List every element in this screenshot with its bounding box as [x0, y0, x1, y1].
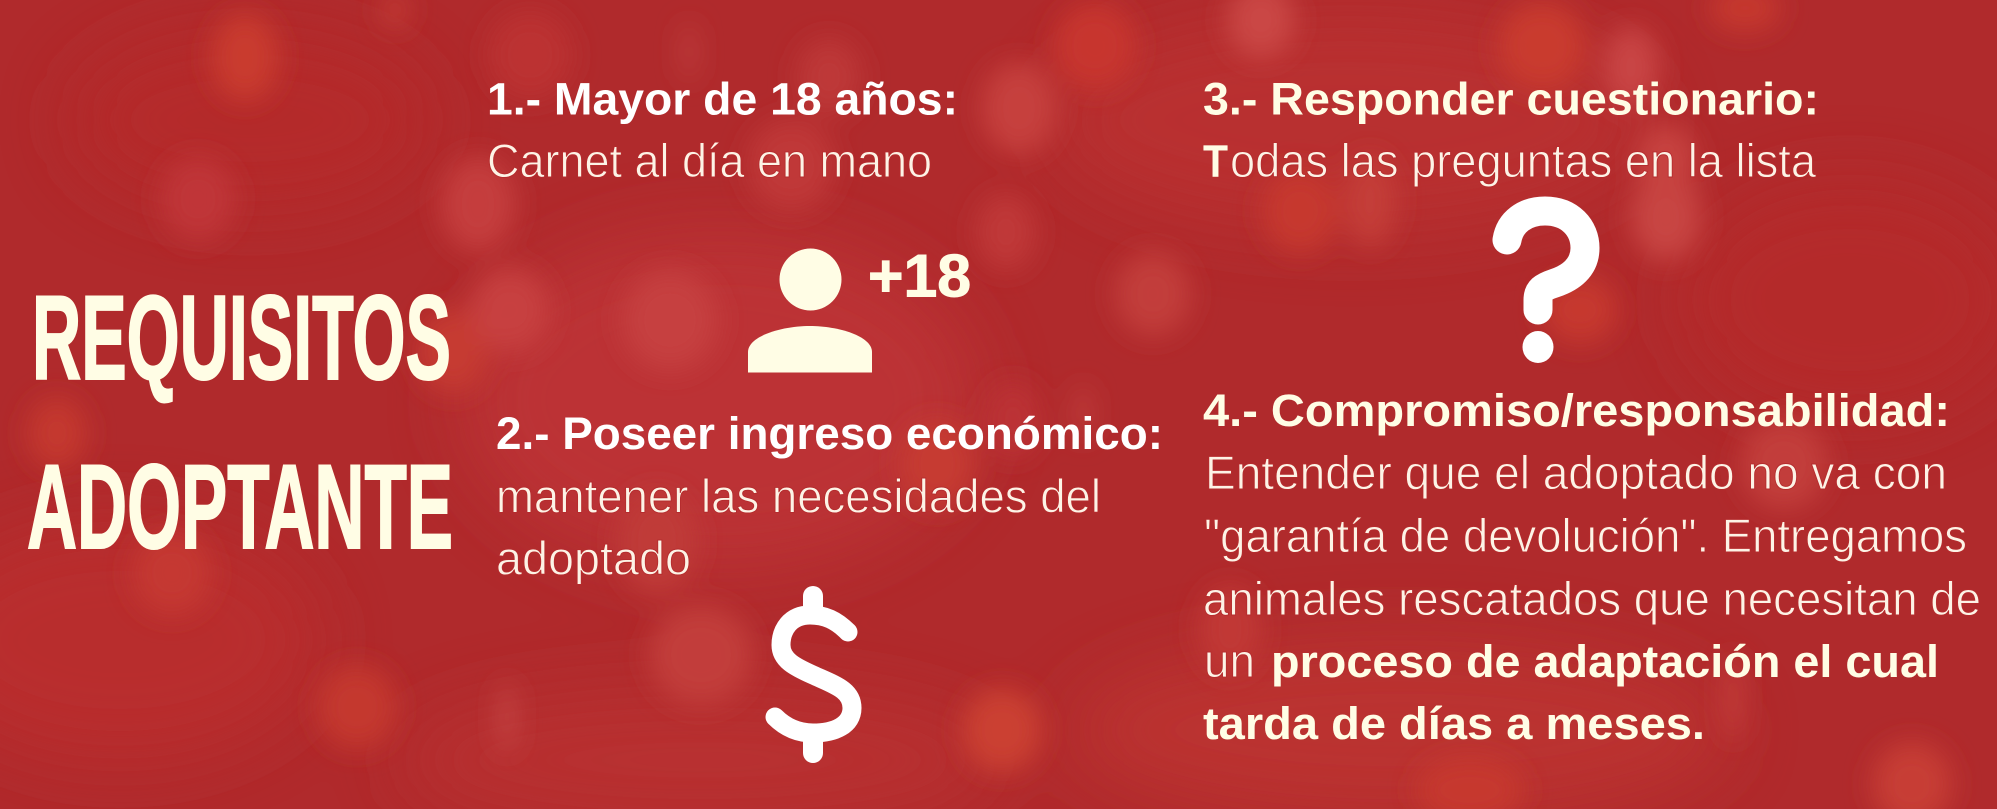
requirement 3 text: 3.- Responder cuestionario: — [1203, 74, 1819, 124]
requirement 2 text — [496, 408, 1163, 584]
icon: question mark — [1507, 211, 1585, 363]
requirement 2 text: 2.- Poseer ingreso económico: — [496, 408, 1163, 459]
icon: person with +18: +18 — [868, 242, 971, 310]
requirement 4 text: tarda de días a meses. — [1203, 698, 1705, 749]
icon: person with +18 — [748, 242, 971, 372]
title: requisitos adoptante: REQUISITOS — [32, 271, 451, 405]
requirement 4 text: animales rescatados que necesitan de — [1203, 572, 1981, 625]
requirement 3 text: odas las preguntas en la lista — [1230, 134, 1817, 187]
requirement 4 text: 4.- Compromiso/responsabilidad: — [1203, 385, 1950, 436]
requirement 3 text — [1203, 74, 1819, 187]
title: requisitos adoptante — [27, 271, 453, 574]
requirement 1 text — [487, 74, 958, 187]
requirement 1 text: Carnet al día en mano — [487, 134, 932, 187]
requirement 2 text: adoptado — [496, 532, 691, 584]
requirement 4 text: "garantía de devolución". Entregamos — [1204, 509, 1967, 562]
requirement 2 text: mantener las necesidades del — [496, 470, 1101, 522]
requirement 1 text: 1.- Mayor de 18 años: — [487, 74, 958, 124]
requirement 4 text: un — [1204, 634, 1255, 687]
requirement 4 text: Entender que el adoptado no va con — [1205, 446, 1947, 499]
requirement 4 text — [1203, 385, 1981, 749]
icon: dollar sign — [775, 596, 852, 753]
requirement 4 text: proceso de adaptación el cual — [1271, 636, 1939, 687]
title: requisitos adoptante: ADOPTANTE — [27, 440, 453, 574]
requirement 3 text: T — [1203, 136, 1228, 187]
